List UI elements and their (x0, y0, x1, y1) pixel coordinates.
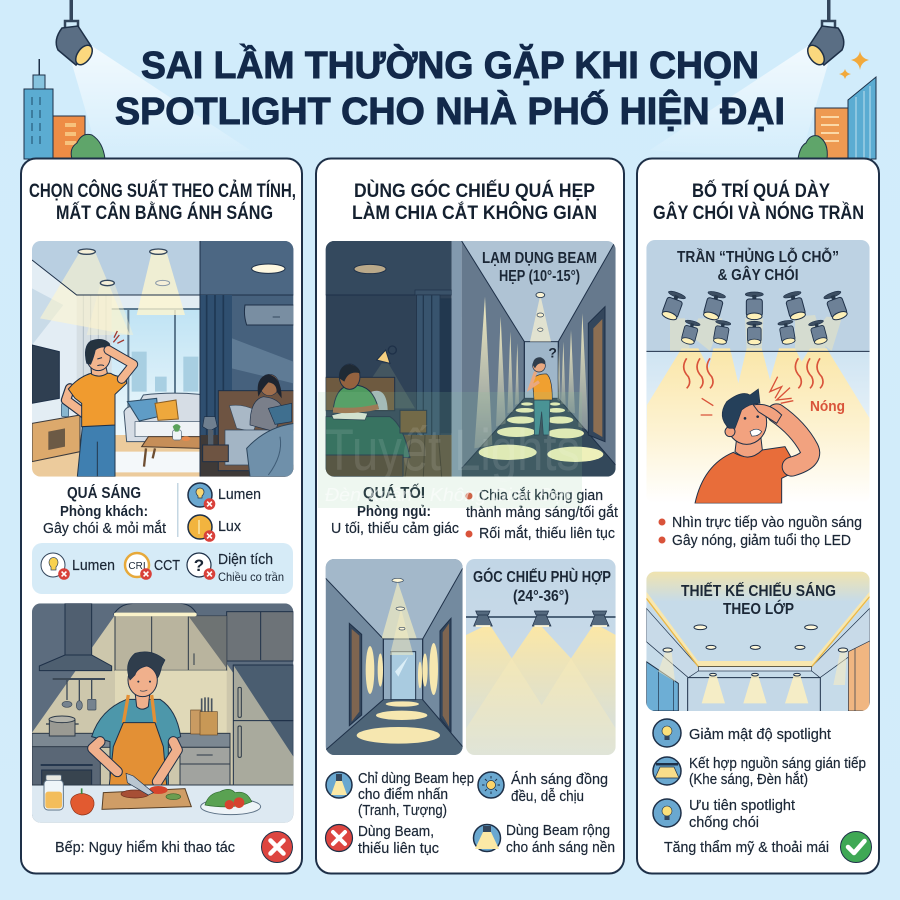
person confused: ? (548, 345, 557, 361)
icon: Lumen (41, 553, 115, 580)
icon row: Lux (188, 515, 241, 542)
label: hot: Nóng (810, 398, 845, 415)
legend: narrow accent only: cho điểm nhấn (358, 786, 448, 803)
icon row: Lumen: Lumen (218, 486, 261, 503)
heading: dense ceiling (677, 247, 839, 284)
legend: narrow accent only: (Tranh, Tượng) (358, 802, 447, 819)
legend: even light: Ánh sáng đồng (511, 771, 608, 788)
item: anti-glare (653, 797, 796, 831)
heading: dense ceiling: & GÂY CHÓI (718, 265, 798, 284)
bullet list: split space: Chia cắt không gian (479, 487, 603, 504)
watermark: Đèn Xuân - Không Gian Đẹp (325, 485, 575, 505)
illustration: dense ceiling glare (646, 240, 870, 503)
heading: good angle: GÓC CHIẾU PHÙ HỢP (473, 567, 611, 586)
icon: sparkles (839, 51, 869, 79)
illustration: kitchen (32, 603, 293, 823)
heading: layered lighting (681, 581, 836, 618)
item: anti-glare: chống chói (689, 814, 759, 831)
legend: red cross beam: Dùng Beam, (358, 823, 434, 840)
heading: dense ceiling: TRẦN “THỦNG LỖ CHỖ” (677, 247, 839, 266)
item: indirect light: Kết hợp nguồn sáng gián tiếp (689, 755, 866, 772)
stressed man (695, 389, 810, 503)
icon: area question: Chiều co trần (218, 570, 284, 584)
legend: narrow accent only: Chỉ dùng Beam hẹp (358, 770, 474, 787)
cook (92, 652, 181, 785)
heading: layered lighting: THIẾT KẾ CHIẾU SÁNG (681, 581, 836, 600)
icon: red cross (262, 832, 292, 862)
label: too bright: Gây chói & mỏi mắt (43, 520, 167, 537)
bullet list: glare (658, 514, 862, 549)
label: too bright: QUÁ SÁNG (67, 483, 141, 502)
icon: stage spotlight right (804, 0, 844, 68)
dark bedroom half (200, 241, 295, 477)
label: too dark (331, 482, 459, 537)
heading: overuse narrow beam (482, 250, 597, 285)
label: too dark: Phòng ngủ: (357, 503, 431, 520)
legend: narrow accent only (326, 770, 474, 819)
man shielding eyes (66, 331, 133, 477)
label: too bright: Phòng khách: (60, 503, 148, 520)
legend: red cross beam (326, 823, 439, 857)
illustration: dim bedroom and narrow beam corridor (326, 241, 616, 477)
title: SPOTLIGHT CHO NHÀ PHỐ HIỆN ĐẠI (115, 88, 785, 133)
caption: kitchen: Bếp: Nguy hiểm khi thao tác (55, 839, 235, 856)
legend: wide beam: Dùng Beam rộng (506, 822, 610, 839)
panel: narrow beam (316, 158, 624, 874)
label: too dark: QUÁ TỐI (363, 482, 425, 502)
bullet list: split space: thành mảng sáng/tối gắt (466, 504, 619, 521)
icon: CRI (125, 553, 180, 580)
person confused (530, 345, 557, 435)
heading: panel 2 (352, 180, 597, 224)
caption: result: Tăng thẩm mỹ & thoải mái (664, 839, 829, 856)
icon row: Lux: Lux (218, 518, 241, 535)
item: reduce density: Giảm mật độ spotlight (689, 726, 832, 743)
item: reduce density (653, 719, 832, 747)
icon: CRI: CCT (154, 557, 180, 574)
label: too bright (43, 483, 167, 537)
legend: even light: đều, dễ chịu (511, 788, 584, 805)
icon row: Lumen (188, 483, 261, 510)
heading: panel 3: BỐ TRÍ QUÁ DÀY (692, 180, 830, 202)
icon: stage spotlight left (56, 0, 96, 68)
item: indirect light (653, 755, 866, 788)
illustration: layered lighting (646, 572, 870, 711)
legend: red cross beam: thiếu liên tục (358, 840, 439, 857)
bullet list: glare: Gây nóng, giảm tuổi thọ LED (672, 532, 851, 549)
heading: good angle (473, 567, 611, 605)
panel: power selection (21, 158, 302, 874)
icon: CRI: CRI (128, 561, 146, 572)
legend: wide beam (474, 822, 615, 856)
icon: Lumen: Lumen (72, 557, 115, 574)
bullet list: split space: Rối mắt, thiếu liên tục (479, 525, 615, 542)
legend: wide beam: cho ánh sáng nền (506, 839, 615, 856)
panel: too dense (637, 158, 879, 874)
heading: layered lighting: THEO LỚP (723, 599, 794, 618)
icon: area question: Diện tích (218, 551, 273, 568)
illustration: bright living room and dark bedroom (32, 241, 295, 477)
item: indirect light: (Khe sáng, Đèn hắt) (689, 771, 808, 788)
spotlight beam right (650, 46, 828, 160)
heading: panel 1 (29, 180, 296, 224)
bullet list: glare: Nhìn trực tiếp vào nguồn sáng (672, 514, 862, 531)
heading: good angle: (24°-36°) (513, 588, 569, 605)
heading: panel 3: GÂY CHÓI VÀ NÓNG TRẦN (653, 202, 864, 224)
label: too dark: U tối, thiếu cảm giác (331, 520, 459, 537)
title: SAI LẦM THƯỜNG GẶP KHI CHỌN (141, 43, 759, 87)
heading: overuse narrow beam: LẠM DỤNG BEAM (482, 250, 597, 267)
heading: panel 2: DÙNG GÓC CHIẾU QUÁ HẸP (354, 180, 595, 202)
icon: area question: ? (194, 556, 204, 575)
spotlight beam left (72, 46, 250, 160)
heading: panel 3 (653, 180, 864, 224)
icon: green check (840, 832, 872, 862)
city left (24, 59, 105, 159)
heading: overuse narrow beam: HẸP (10°-15°) (499, 268, 580, 285)
title (115, 43, 785, 133)
city right (798, 77, 876, 159)
item: anti-glare: Ưu tiên spotlight (689, 797, 796, 814)
icon: area question (187, 551, 284, 584)
heading: panel 1: CHỌN CÔNG SUẤT THEO CẢM TÍNH, (29, 180, 296, 202)
heading: panel 2: LÀM CHIA CẮT KHÔNG GIAN (352, 202, 597, 224)
legend: even light (478, 771, 608, 805)
illustration: balanced corridor (326, 559, 616, 755)
watermark: Tuyết Lights (325, 418, 580, 483)
heading: panel 1: MẤT CÂN BẰNG ÁNH SÁNG (56, 202, 273, 224)
bullet list: split space (466, 487, 619, 542)
watermark (318, 392, 582, 508)
strip: missing criteria (32, 543, 293, 594)
